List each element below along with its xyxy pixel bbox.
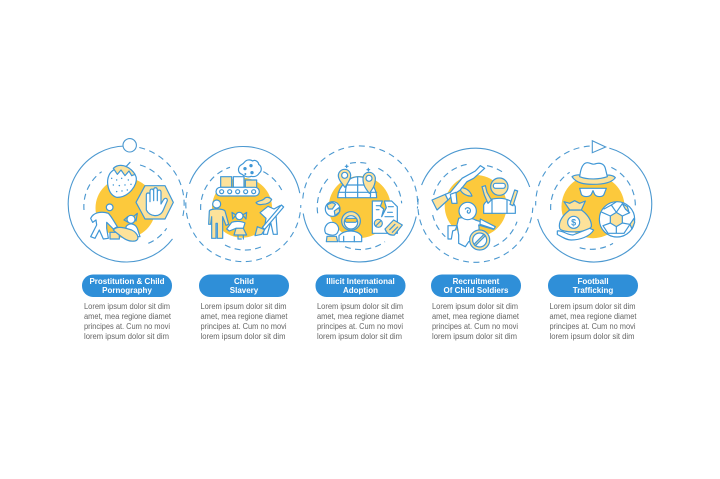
text block: step 1: Lorem ipsum dolor sit dim [84, 302, 170, 311]
text block: step 2: amet, mea regione diamet [200, 312, 288, 321]
text block: step 4: principes at. Cum no movi [432, 322, 518, 331]
icons and inner arcs [201, 160, 284, 250]
outer ring [190, 147, 300, 193]
icon: child seen from behind [325, 222, 339, 242]
text block: step 2: lorem ipsum dolor sit dim [200, 332, 286, 341]
icon: sunglasses [580, 188, 606, 197]
icon: hat [572, 163, 615, 184]
label pill: child slavery: Child [234, 277, 254, 286]
inner dashed arcs [84, 165, 167, 243]
outer ring [422, 148, 530, 187]
outer ring [538, 148, 652, 262]
label pill: prostitution and child pornography: Prostitution & Child [89, 277, 165, 286]
text block: step 5: principes at. Cum no movi [550, 322, 636, 331]
inner dashed arcs [201, 167, 282, 250]
panel: prostitution and child pornography [68, 139, 184, 262]
step marker circle [123, 139, 136, 152]
icon: child on blanket [110, 213, 140, 241]
yellow blob [445, 175, 507, 237]
icon: masked person [339, 212, 362, 242]
text block: step 3: amet, mea regione diamet [317, 312, 405, 321]
text block: step 3: lorem ipsum dolor sit dim [317, 332, 402, 341]
icon: prohibition sign [470, 230, 490, 250]
icon: soccer ball [599, 202, 635, 237]
label pill: recruitment of child soldiers [431, 274, 521, 297]
icon: strawberry [108, 162, 136, 197]
icon: stop sign with hand [136, 186, 173, 219]
panel: football trafficking [536, 141, 652, 262]
text block: step 5: lorem ipsum dolor sit dim [550, 332, 635, 341]
icon: location pins [338, 165, 375, 193]
text block: step 3: Lorem ipsum dolor sit dim [317, 302, 403, 311]
label pill: football trafficking: Football [577, 277, 609, 286]
label pill: recruitment of child soldiers: Recruitment [453, 277, 500, 286]
text block: step 2 [200, 302, 288, 341]
outer dashed arc [536, 146, 590, 206]
text block: step 2: Lorem ipsum dolor sit dim [200, 302, 287, 311]
icon: assault rifle [432, 166, 485, 210]
outer dashed arc [186, 192, 301, 262]
icon: conveyor belt with boxes [216, 177, 259, 196]
icon: small globe [325, 202, 340, 216]
icons and inner arcs [432, 164, 518, 250]
label pill: child slavery: Slavery [230, 286, 259, 295]
text block: step 4: lorem ipsum dolor sit dim [432, 332, 517, 341]
inner dashed arcs [433, 164, 517, 247]
label pill: prostitution and child pornography [82, 274, 172, 297]
icons and inner arcs [84, 162, 173, 243]
outer ring [68, 146, 184, 262]
text block: step 3 [317, 302, 405, 341]
icon: rough gem [238, 160, 261, 177]
inner dashed arcs [317, 163, 402, 250]
text block: step 5 [550, 302, 637, 341]
panel: child slavery [186, 147, 301, 262]
text block: step 1: lorem ipsum dolor sit dim [84, 332, 169, 341]
step marker triangle [592, 141, 606, 153]
label pill: illicit international adoption: Illicit International [326, 277, 395, 286]
icon: masked soldier [482, 178, 518, 213]
outer ring [303, 214, 416, 262]
icon: handshake [385, 220, 402, 235]
icon: girl in dress [227, 212, 247, 239]
panel: illicit international adoption [303, 146, 418, 262]
yellow blob [96, 178, 156, 238]
label pill: illicit international adoption [316, 274, 406, 297]
text block: step 3: principes at. Cum no movi [317, 322, 403, 331]
icon: man holding girl's hand [209, 200, 229, 238]
icons and inner arcs [317, 163, 402, 250]
icon: toddler with pistols [448, 202, 495, 247]
text block: step 1: principes at. Cum no movi [84, 322, 170, 331]
panel: recruitment of child soldiers [418, 148, 533, 262]
text block: step 5: Lorem ipsum dolor sit dim [550, 302, 636, 311]
icon: money bag on hand: $ [571, 218, 576, 228]
text block: step 1: amet, mea regione diamet [84, 312, 172, 321]
text block: step 1 [84, 302, 172, 341]
icon: worker with hat and shovel [255, 197, 284, 236]
yellow blob [562, 175, 624, 238]
label pill: prostitution and child pornography: Pornography [102, 286, 152, 295]
label pill: illicit international adoption: Adoption [343, 286, 378, 295]
label pill: football trafficking [548, 274, 638, 297]
outer dashed arc [418, 199, 533, 262]
outer dashed arc [303, 146, 418, 208]
text block: step 5: amet, mea regione diamet [550, 312, 637, 321]
inner dashed arcs [551, 167, 635, 249]
icon: globe dome [338, 177, 377, 198]
label pill: football trafficking: Trafficking [573, 286, 613, 295]
label pill: child slavery [199, 274, 289, 297]
yellow blob [212, 178, 272, 238]
icon: torn document [372, 201, 397, 233]
text block: step 4: amet, mea regione diamet [432, 312, 520, 321]
text block: step 4: Lorem ipsum dolor sit dim [432, 302, 518, 311]
icon: adult stooping figure [91, 204, 117, 239]
label pill: recruitment of child soldiers: Of Child Soldiers [444, 286, 509, 295]
text block: step 4 [432, 302, 520, 341]
text block: step 2: principes at. Cum no movi [200, 322, 287, 331]
yellow blob [329, 176, 391, 238]
